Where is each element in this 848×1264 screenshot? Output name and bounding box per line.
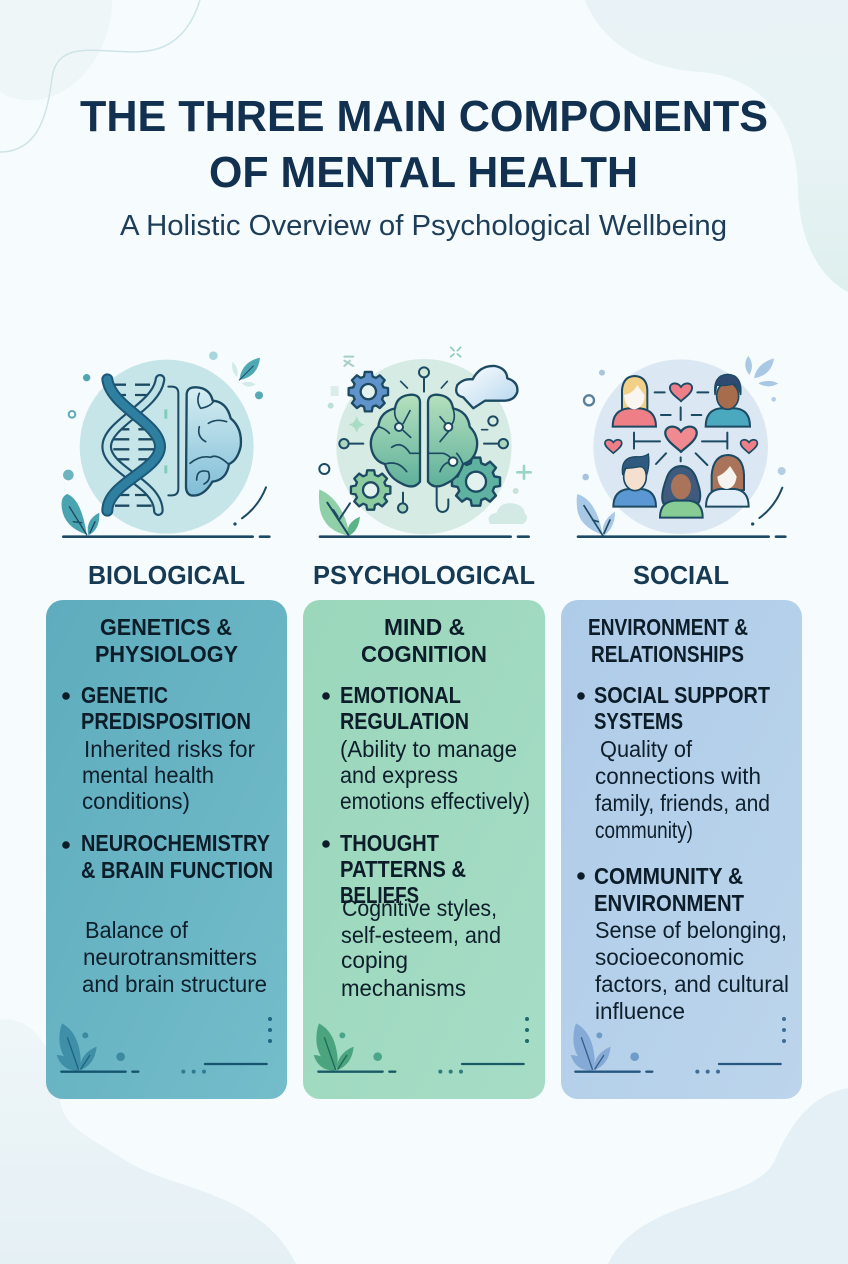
icon: connected people and hearts [577,356,786,537]
bullet: community and environment: Sense of belonging, [595,917,787,943]
panel heading: mind and cognition: MIND & [384,614,465,640]
bullet: thought patterns and beliefs: PATTERNS & [340,856,466,882]
panel heading: mind and cognition: COGNITION [361,641,487,667]
bullet: thought patterns and beliefs: THOUGHT [340,830,439,856]
bullet: neurochemistry and brain function: & BRAIN FUNCTION [81,857,273,883]
title: THE THREE MAIN COMPONENTS [80,92,768,141]
person: middle left [613,454,656,507]
bullet: neurochemistry and brain function: NEUROCHEMISTRY [81,830,270,856]
bullet: community and environment: influence [595,998,685,1024]
bullet: genetic predisposition [62,682,255,814]
bullet: genetic predisposition: conditions) [82,788,190,814]
title: OF MENTAL HEALTH [209,148,638,197]
bullet: genetic predisposition: GENETIC [81,682,168,708]
bullet: community and environment: socioeconomic [595,944,744,970]
icon: DNA and brain [62,351,269,537]
subtitle: A Holistic Overview of Psychological Wellbeing [120,210,727,242]
bullet: social support systems: family, friends, and [595,790,770,816]
panel decoration: leaf and lines [571,1017,786,1074]
panel decoration: leaf and lines [314,1017,529,1074]
bullet: community and environment: ENVIRONMENT [594,890,744,916]
bullet: emotional regulation: EMOTIONAL [340,682,461,708]
bullet: emotional regulation: REGULATION [340,708,469,734]
panel heading: genetics and physiology: GENETICS & [100,614,232,640]
panel decoration: leaf and lines [57,1017,272,1074]
bullet: thought patterns and beliefs: coping [341,947,408,973]
panel heading: environment and relationships: ENVIRONMENT & [588,614,748,640]
bullet: emotional regulation [322,682,530,814]
bullet: neurochemistry and brain function [62,830,273,997]
heading: psychological: PSYCHOLOGICAL [313,560,535,590]
bullet: genetic predisposition: mental health [82,762,214,788]
bullet: emotional regulation: emotions effectively) [340,788,530,814]
panel heading: environment and relationships [588,614,748,667]
bullet: social support systems: community) [595,817,693,843]
bullet: social support systems: SOCIAL SUPPORT [594,682,770,708]
person: middle centre [660,466,703,518]
decorative curve: top left [0,0,200,152]
bullet: community and environment: factors, and cultural [595,971,789,997]
bullet: social support systems: SYSTEMS [594,708,683,734]
panel heading: genetics and physiology [95,614,238,667]
heading: social: SOCIAL [633,560,729,590]
person: top left [613,376,656,427]
bullet: thought patterns and beliefs: Cognitive styles, [342,895,497,921]
bullet: emotional regulation: (Ability to manage [340,736,517,762]
title [80,92,768,197]
panel: social [561,600,802,1099]
heading: biological: BIOLOGICAL [88,560,245,590]
person: middle right [706,455,749,507]
bullet: thought patterns and beliefs [322,830,501,1001]
bullet: social support systems [577,682,770,843]
bullet: neurochemistry and brain function: neurotransmitters [83,944,257,970]
bullet: community and environment [577,863,789,1024]
bullet: genetic predisposition: PREDISPOSITION [81,708,251,734]
bullet: neurochemistry and brain function: Balance of [85,917,189,943]
bullet: thought patterns and beliefs: self-esteem, and [341,922,501,948]
icon: brain, gears and thought cloud [319,347,531,537]
bullet: community and environment: COMMUNITY & [594,863,743,889]
bullet: social support systems: Quality of [600,736,693,762]
bullet: social support systems: connections with [595,763,761,789]
person: top right [706,374,750,427]
bullet: emotional regulation: and express [340,762,458,788]
bullet: thought patterns and beliefs: mechanisms [341,975,466,1001]
panel heading: genetics and physiology: PHYSIOLOGY [95,641,238,667]
panel: psychological [303,600,545,1099]
panel heading: environment and relationships: RELATIONSHIPS [591,641,744,667]
panel: biological [46,600,287,1099]
bullet: thought patterns and beliefs: BELIEFS [340,882,419,908]
bullet: neurochemistry and brain function: and brain structure [82,971,267,997]
panel heading: mind and cognition [361,614,487,667]
bullet: genetic predisposition: Inherited risks for [84,736,255,762]
